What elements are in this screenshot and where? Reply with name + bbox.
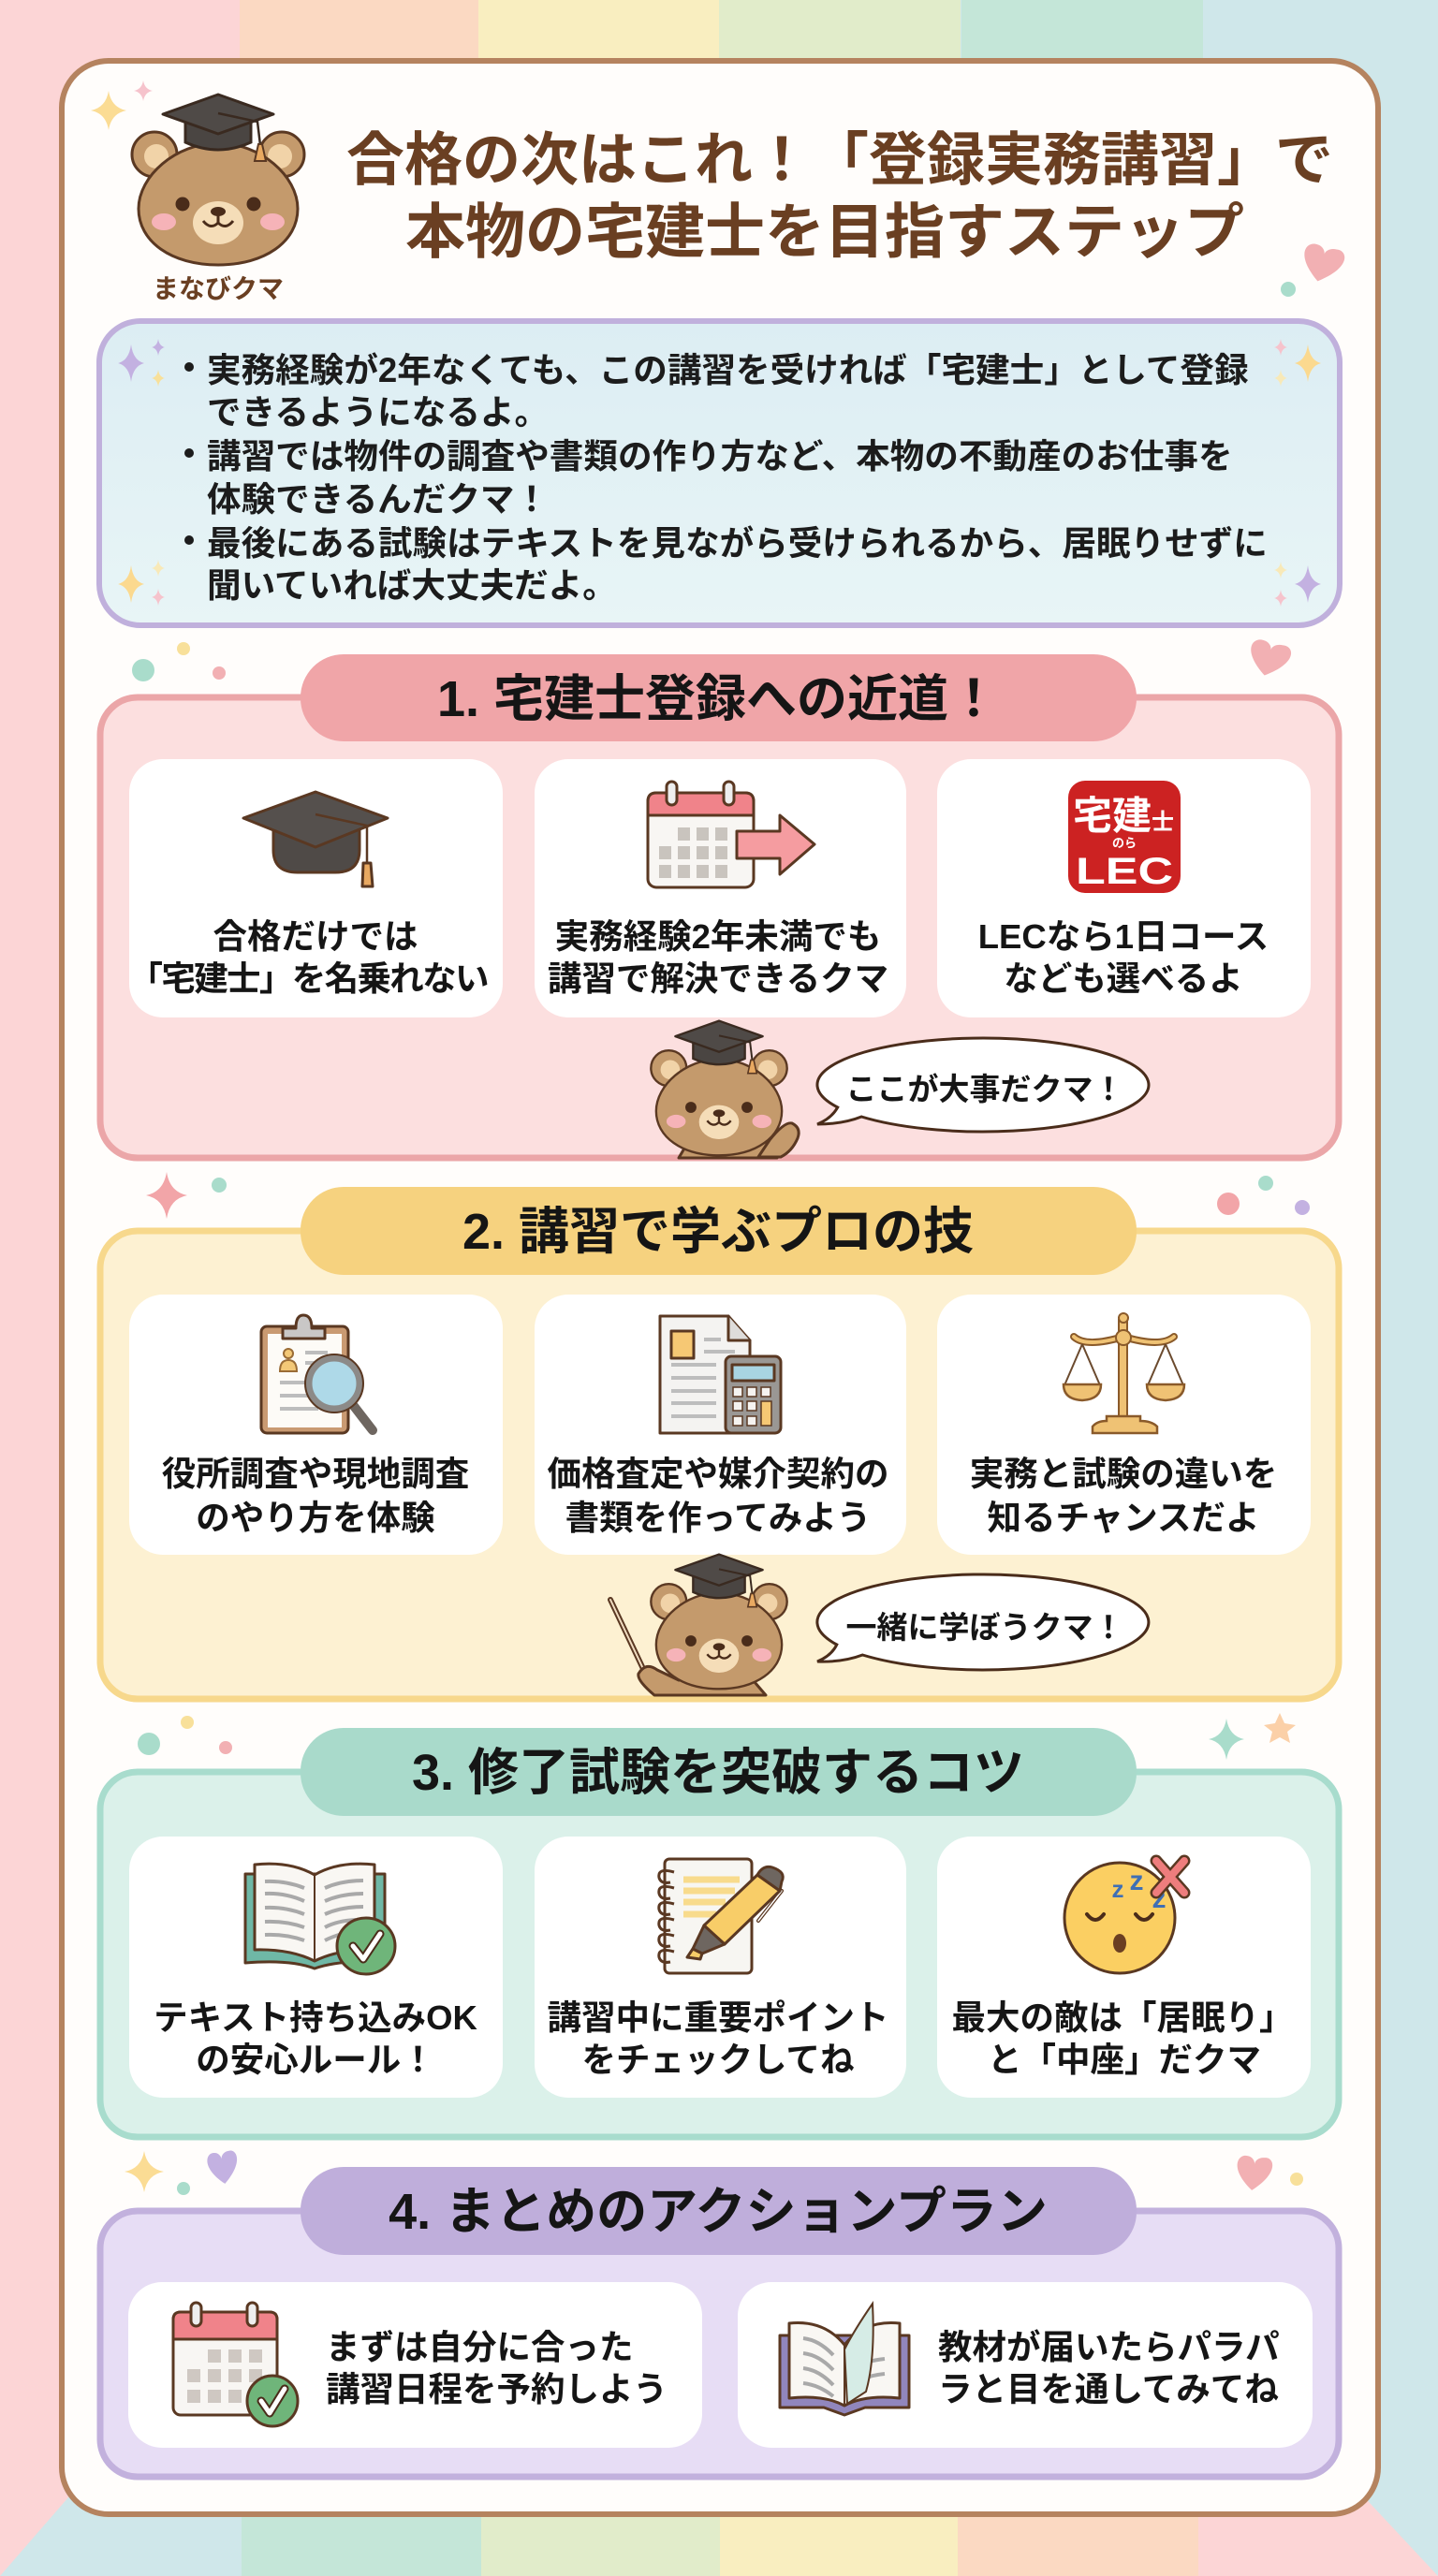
section 3 decorations — [138, 1713, 1296, 1760]
card: calendar: 講習で解決できるクマ — [548, 959, 888, 998]
card: LEC: LECなら1日コース — [978, 917, 1269, 956]
speech bubble: section 2: 一緒に学ぼうクマ！ — [846, 1610, 1123, 1645]
card: notebook: をチェックしてね — [582, 2041, 855, 2079]
card: LEC: なども選べるよ — [1004, 959, 1243, 998]
icon: LEC logo: 宅建士 — [1073, 794, 1174, 838]
card: open book — [129, 1837, 503, 2098]
icon: calendar with check — [173, 2303, 298, 2426]
heading pill: section 2 — [301, 1187, 1137, 1275]
section 1 decorations — [132, 637, 1293, 681]
icon: calendar with arrow — [648, 782, 814, 887]
intro bullet list: 最後にある試験はテキストを見ながら受けられるから、居眠りせずに — [207, 524, 1268, 563]
heading pill: section 4: 4. まとめのアクションプラン — [389, 2184, 1048, 2240]
icon: graduation cap — [243, 792, 388, 886]
card: balance — [937, 1295, 1311, 1555]
icon: sleepy face: z — [1112, 1875, 1123, 1903]
card: cap: 合格だけでは — [213, 917, 418, 956]
intro bullet list: 聞いていれば大丈夫だよ。 — [207, 566, 617, 605]
icon: LEC logo: LEC — [1076, 851, 1173, 892]
mascot: pointing bear — [610, 1555, 787, 1695]
icon: notebook and highlighter — [659, 1859, 783, 1973]
intro bullet list: 実務経験が2年なくても、この講習を受ければ「宅建士」として登録 — [207, 351, 1249, 389]
mascot name: まなびクマ — [153, 274, 284, 303]
header decorations — [91, 80, 1346, 297]
heading pill: section 3 — [301, 1728, 1137, 1816]
panel: section 3 — [100, 1728, 1339, 2137]
card: reserve — [128, 2282, 702, 2448]
heading pill: section 1: 1. 宅建士登録への近道！ — [437, 671, 999, 727]
card: skim materials: ラと目を通してみてね — [938, 2370, 1279, 2408]
icon: sleepy face — [1064, 1861, 1184, 1973]
icon: clipboard with magnifier — [261, 1315, 373, 1433]
title — [346, 128, 1333, 266]
icon: LEC logo: のら — [1112, 836, 1137, 850]
card: documents — [535, 1295, 906, 1555]
title: 本物の宅建士を目指すステップ — [405, 198, 1244, 266]
icon: flipping book — [780, 2304, 909, 2415]
section 2 decorations — [146, 1172, 1310, 1219]
card: cap: 「宅建士」を名乗れない — [129, 959, 489, 998]
icon: book with check — [245, 1864, 395, 1974]
panel: intro summary — [99, 321, 1340, 625]
card: cap — [129, 759, 503, 1017]
card: research: のやり方を体験 — [196, 1499, 435, 1537]
speech bubble: section 2 — [817, 1574, 1149, 1670]
title: 合格の次はこれ！「登録実務講習」で — [346, 128, 1333, 193]
card: sleep: と「中座」だクマ — [988, 2041, 1261, 2079]
intro bullet list: 講習では物件の調査や書類の作り方など、本物の不動産のお仕事を — [207, 437, 1233, 476]
intro bullet list: 体験できるんだクマ！ — [207, 480, 549, 519]
panel: section 1 — [100, 654, 1339, 1158]
heading pill: section 3: 3. 修了試験を突破するコツ — [412, 1745, 1024, 1801]
card: sleep: 最大の敵は「居眠り」 — [951, 1998, 1294, 2037]
card: skim materials: 教材が届いたらパラパ — [938, 2328, 1280, 2366]
panel: section 2 — [100, 1187, 1339, 1699]
card: research: 役所調査や現地調査 — [162, 1455, 469, 1493]
card: balance: 知るチャンスだよ — [988, 1499, 1259, 1537]
card: open book: の安心ルール！ — [196, 2041, 435, 2079]
icon: sleepy face: z — [1129, 1866, 1144, 1896]
card: open book: テキスト持ち込みOK — [154, 1998, 477, 2037]
card: skim materials — [738, 2282, 1313, 2448]
heading pill: section 4 — [301, 2167, 1137, 2255]
card: reserve: まずは自分に合った — [326, 2328, 633, 2366]
section 4 decorations — [125, 2150, 1303, 2195]
panel: section 4 — [100, 2167, 1339, 2477]
speech bubble: section 1 — [817, 1038, 1149, 1132]
mascot: manabi kuma — [132, 95, 304, 303]
heading pill: section 1 — [301, 654, 1137, 741]
card: balance: 実務と試験の違いを — [970, 1455, 1277, 1493]
mascot: waving bear — [651, 1021, 799, 1158]
card: research — [129, 1295, 503, 1555]
card: calendar: 実務経験2年未満でも — [555, 917, 881, 956]
card: notebook — [535, 1837, 906, 2098]
intro bullet list — [184, 351, 1268, 605]
card: sleep — [937, 1837, 1311, 2098]
card: calendar — [535, 759, 906, 1017]
card: LEC — [937, 759, 1311, 1017]
icon: sleepy face: z — [1152, 1883, 1167, 1914]
card: notebook: 講習中に重要ポイント — [547, 1998, 889, 2037]
bear head with graduation cap — [132, 95, 304, 265]
intro bullet list: できるようになるよ。 — [207, 393, 549, 432]
heading pill: section 2: 2. 講習で学ぶプロの技 — [462, 1204, 974, 1260]
card: documents: 書類を作ってみよう — [565, 1499, 871, 1537]
icon: scales — [1064, 1313, 1184, 1433]
speech bubble: section 1: ここが大事だクマ！ — [846, 1072, 1123, 1106]
icon: document and calculator — [660, 1316, 781, 1433]
card: reserve: 講習日程を予約しよう — [326, 2370, 668, 2408]
icon: LEC logo — [1068, 781, 1181, 893]
card: documents: 価格査定や媒介契約の — [547, 1455, 889, 1493]
